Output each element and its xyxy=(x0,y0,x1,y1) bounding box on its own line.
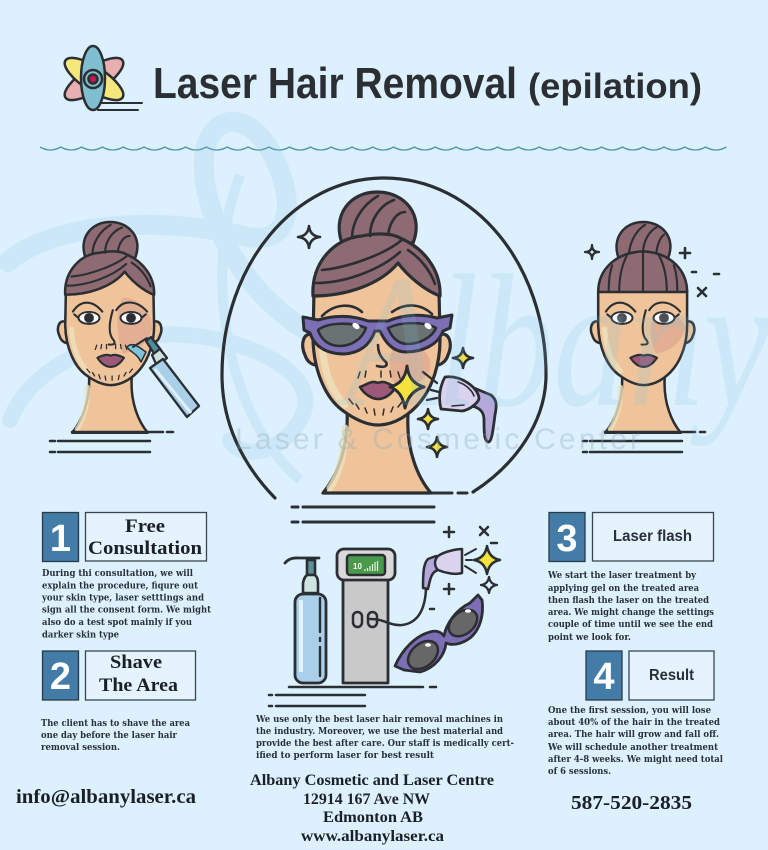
neck xyxy=(605,375,681,433)
sunglasses xyxy=(303,315,452,354)
wave divider xyxy=(40,147,726,150)
step 2 text: one day before the laser hair xyxy=(41,730,178,741)
heading box xyxy=(629,651,714,700)
eyes xyxy=(73,302,147,324)
step 2 text xyxy=(41,718,190,753)
step 1 text: darker skin type xyxy=(42,629,119,640)
number badge 2 xyxy=(42,651,78,700)
step 2 text: The client has to shave the area xyxy=(41,718,190,729)
step 3 text: point we look for. xyxy=(548,632,631,643)
icon: atom logo xyxy=(59,46,142,110)
step 1 text: sign all the consent form. We might xyxy=(42,605,212,616)
dashes under device xyxy=(269,687,436,706)
title: Laser Hair Removal xyxy=(153,59,517,108)
heading box: Laser flash xyxy=(613,528,692,545)
heading box: Consultation xyxy=(88,539,203,559)
centre text block: We use only the best laser hair removal machines in xyxy=(255,714,503,725)
email: info@albanylaser.ca xyxy=(16,786,196,808)
skin highlight xyxy=(604,329,621,429)
number badge 4: 4 xyxy=(593,656,615,698)
neck xyxy=(72,375,148,433)
hair xyxy=(313,234,440,296)
number badge 1 xyxy=(42,512,78,562)
watermark text: Laser & Cosmetic Center xyxy=(235,423,640,456)
icon: laser machine: 10 xyxy=(353,562,362,571)
step 4 text: One the first session, you will lose xyxy=(548,705,711,716)
head: step 1 gel application xyxy=(58,222,199,433)
nose xyxy=(377,345,387,367)
heading box: Shave xyxy=(110,653,162,673)
ears xyxy=(591,321,694,343)
step 4 text: of 6 sessions. xyxy=(548,766,611,777)
face xyxy=(65,263,154,385)
heading box xyxy=(592,512,714,561)
fringe hair xyxy=(598,251,687,292)
step 4 text xyxy=(547,705,723,777)
bun xyxy=(339,192,416,243)
heading box xyxy=(86,512,206,561)
heading box: The Area xyxy=(99,676,178,696)
step 4 text: about 40% of the hair in the treated xyxy=(548,717,720,728)
step 1 text: explain the procedure, fiqure out xyxy=(42,580,199,591)
step 3 text: then flash the laser on the treated xyxy=(548,595,709,606)
cheek shading xyxy=(650,312,685,354)
head: laser treatment xyxy=(298,192,496,493)
heading box xyxy=(86,651,196,700)
step 1 text: During thi consultation, we will xyxy=(42,568,193,579)
address block: Edmonton AB xyxy=(323,809,423,826)
heading box: Free xyxy=(125,517,165,537)
step 3 text xyxy=(547,570,714,643)
nose xyxy=(109,310,115,345)
bun xyxy=(84,222,137,258)
step 4 text: area. The hair will grow and fall off. xyxy=(548,729,719,740)
address block xyxy=(250,772,494,845)
eyes xyxy=(606,302,680,324)
number badge 3: 3 xyxy=(556,518,578,560)
centre text block: the industry. Moreover, we use the best material and xyxy=(256,726,503,737)
dashes under central head xyxy=(292,493,467,522)
marks around clean head xyxy=(585,245,719,296)
face xyxy=(598,291,687,385)
panel: step 1 xyxy=(41,512,212,640)
heading box: Result xyxy=(649,667,695,684)
bun xyxy=(617,222,670,258)
step 3 text: couple of time until we see the end xyxy=(548,619,713,630)
dashes under head 3 xyxy=(583,432,705,452)
step 3 text: applying gel on the treated area xyxy=(548,583,699,594)
number badge 2: 2 xyxy=(50,656,71,698)
address block: www.albanylaser.ca xyxy=(301,828,444,845)
icon: handpiece and spark xyxy=(423,527,500,609)
centre text block xyxy=(255,714,514,761)
lips xyxy=(360,382,396,399)
brows xyxy=(322,305,432,316)
step 1 text xyxy=(41,568,212,640)
panel: step 2 xyxy=(41,651,196,753)
hair xyxy=(65,251,154,295)
stubble xyxy=(87,344,132,380)
cheek shading xyxy=(390,345,430,387)
number badge 4 xyxy=(586,651,622,700)
dashes under head 1 xyxy=(50,432,173,452)
icon: gel bottle xyxy=(127,337,199,417)
step 4 text: We will schedule another treatment xyxy=(547,742,719,753)
skin highlight xyxy=(322,345,345,488)
address block: Albany Cosmetic and Laser Centre xyxy=(250,772,494,789)
step 1 text: your skin type, laser setttings and xyxy=(41,593,204,604)
step 3 text: area. We might change the settings xyxy=(548,607,714,618)
skin highlight xyxy=(72,329,88,429)
icon: protective glasses xyxy=(395,595,482,675)
panel: step 3 xyxy=(547,512,714,643)
lips xyxy=(630,355,657,367)
ears xyxy=(303,334,450,365)
step 4 text: after 4-8 weeks. We might need total xyxy=(548,754,723,765)
laser handpiece xyxy=(423,372,496,442)
step 1 text: also do a test spot mainly if you xyxy=(42,617,192,628)
number badge 1: 1 xyxy=(50,518,71,560)
stubble xyxy=(349,371,402,415)
nose xyxy=(642,310,648,345)
star flash xyxy=(390,366,424,408)
cheek shading xyxy=(117,298,152,354)
step 3 text: We start the laser treatment by xyxy=(547,570,696,581)
number badge 3 xyxy=(549,512,585,562)
neck xyxy=(323,410,431,493)
address block: 12914 167 Ave NW xyxy=(303,791,430,808)
ears xyxy=(58,321,161,343)
step 2 text: removal session. xyxy=(41,742,120,753)
head: clean result xyxy=(591,222,694,433)
face xyxy=(313,250,440,425)
watermark swirls xyxy=(8,122,350,480)
title: (epilation) xyxy=(528,67,702,106)
panel: step 4 xyxy=(547,651,723,777)
centre text block: ified to perform laser for best result xyxy=(256,750,435,761)
icon: pump bottle xyxy=(285,558,326,683)
lips xyxy=(97,355,124,367)
arch around central head xyxy=(222,178,546,498)
phone: 587-520-2835 xyxy=(571,792,692,814)
centre text block: provide the best after care. Our staff is medically cert- xyxy=(256,738,514,749)
sparkles xyxy=(298,226,473,457)
icon: laser machine xyxy=(337,549,426,683)
